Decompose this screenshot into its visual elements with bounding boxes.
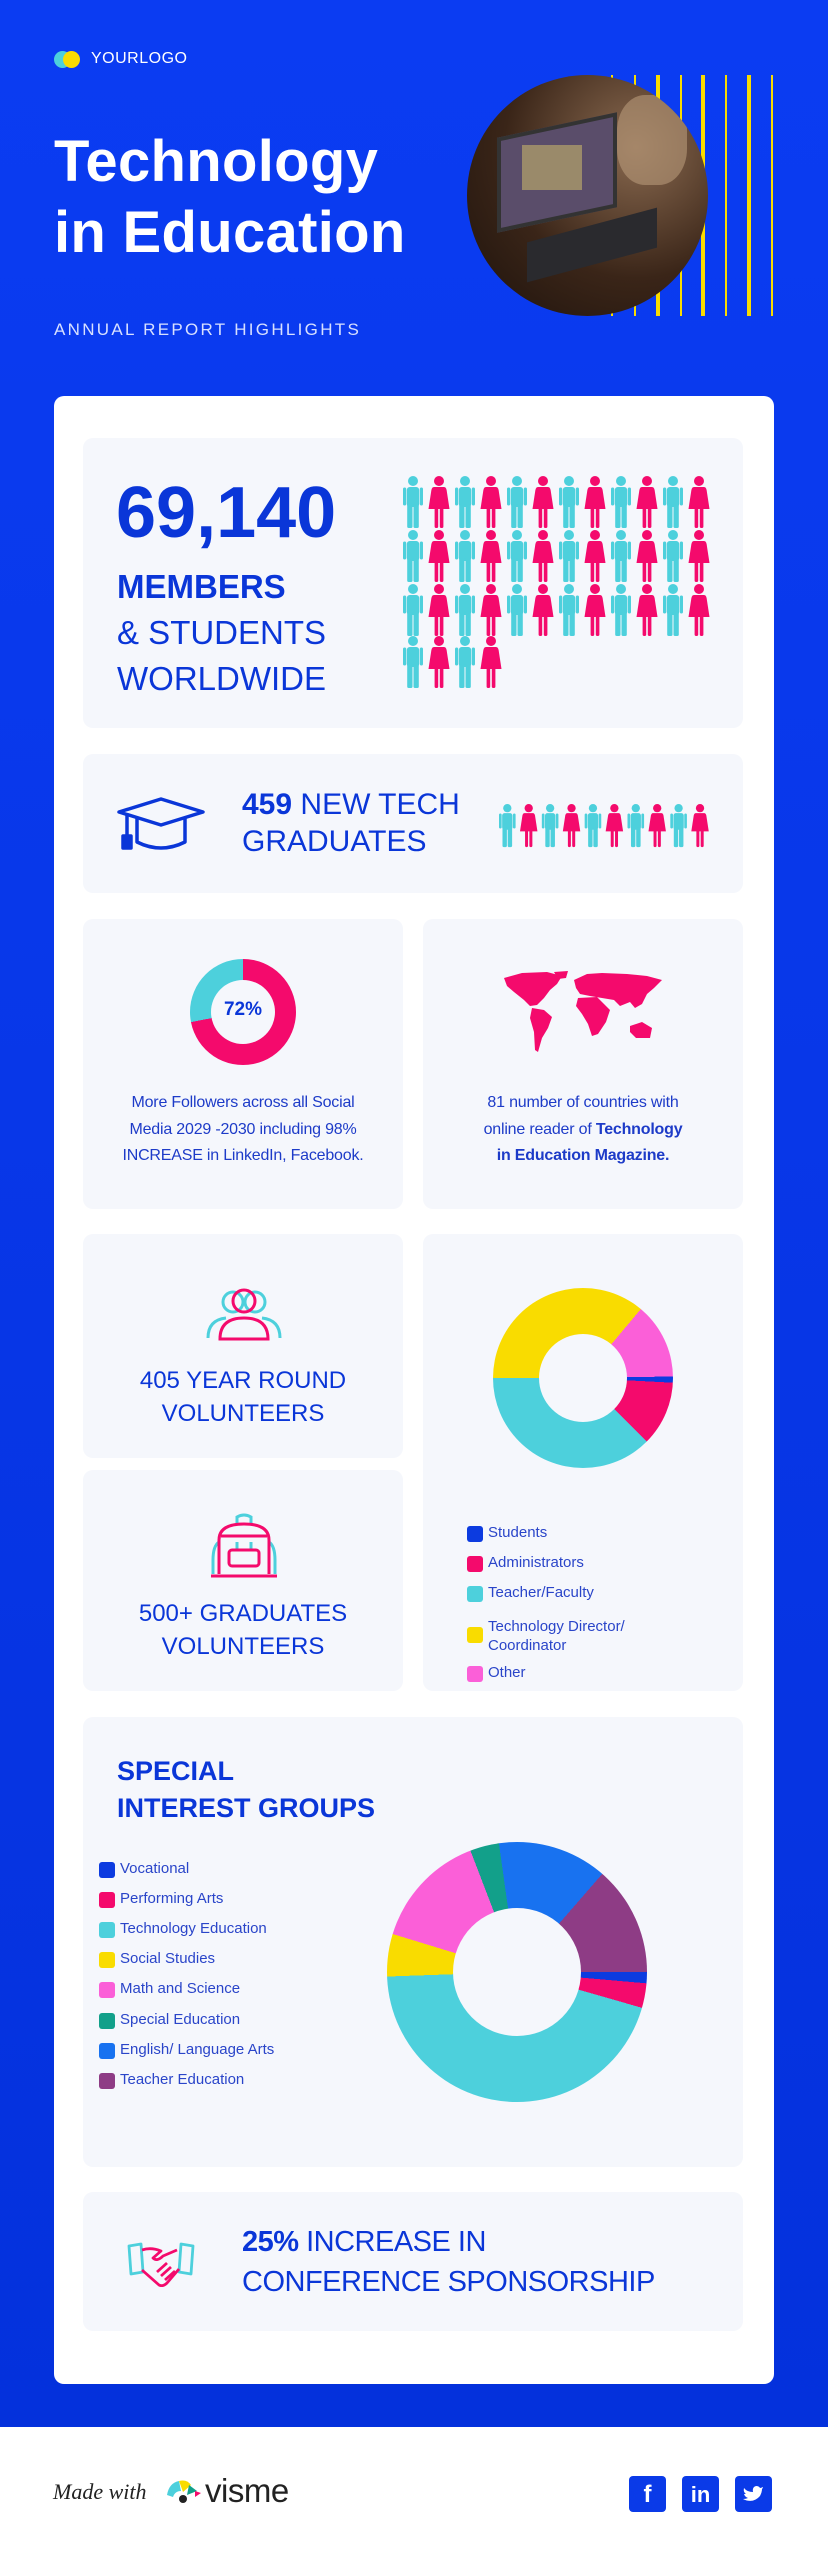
panel: roles donut chart bbox=[423, 1234, 743, 1691]
text: More Followers across all Social bbox=[131, 1094, 354, 1111]
footer: made with visme bbox=[52, 2472, 289, 2509]
icon: graduation cap bbox=[117, 797, 205, 850]
text bbox=[139, 1600, 347, 1660]
legend: Technology Director/ bbox=[488, 1618, 625, 1635]
decorative yellow lines bbox=[611, 75, 773, 316]
legend bbox=[99, 1860, 274, 2089]
panel: members bbox=[83, 438, 743, 728]
panel: countries bbox=[423, 919, 743, 1209]
donut chart bbox=[493, 1288, 673, 1468]
white card bbox=[54, 396, 774, 2384]
footer: made with visme: Made with bbox=[53, 2479, 146, 2504]
panel: graduates bbox=[83, 754, 743, 893]
members text: & STUDENTS bbox=[117, 614, 326, 651]
panel: special interest groups bbox=[83, 1717, 743, 2167]
subtitle: ANNUAL REPORT HIGHLIGHTS bbox=[54, 320, 361, 339]
text: VOLUNTEERS bbox=[162, 1633, 324, 1660]
title: in Education bbox=[54, 200, 406, 265]
big number: 69,140 bbox=[116, 473, 336, 553]
legend: English/ Language Arts bbox=[120, 2041, 274, 2058]
people pictogram bbox=[403, 476, 710, 688]
icon: world map bbox=[504, 971, 662, 1052]
panel: year round volunteers bbox=[83, 1234, 403, 1458]
text bbox=[140, 1367, 346, 1427]
members text: WORLDWIDE bbox=[117, 660, 326, 697]
donut 72% bbox=[190, 959, 296, 1065]
text bbox=[122, 1094, 364, 1164]
icon: handshake bbox=[128, 2242, 194, 2287]
panel: social followers bbox=[83, 919, 403, 1209]
legend: Social Studies bbox=[120, 1950, 215, 1967]
text: INCREASE in LinkedIn, Facebook. bbox=[122, 1147, 364, 1164]
graduates text: GRADUATES bbox=[242, 825, 426, 858]
text bbox=[484, 1094, 682, 1164]
text: online reader of Technology bbox=[484, 1120, 682, 1138]
graduates text bbox=[242, 788, 460, 858]
legend: Math and Science bbox=[120, 1980, 240, 1997]
text: VOLUNTEERS bbox=[162, 1400, 324, 1427]
members text: MEMBERS bbox=[117, 568, 286, 605]
social icons: f bbox=[644, 2481, 652, 2508]
graduates text: 459 NEW TECH bbox=[242, 788, 460, 821]
legend: Administrators bbox=[488, 1554, 584, 1571]
text: 81 number of countries with bbox=[487, 1094, 679, 1111]
text bbox=[242, 2226, 655, 2298]
legend: Other bbox=[488, 1664, 526, 1681]
legend: Performing Arts bbox=[120, 1890, 223, 1907]
legend: Teacher/Faculty bbox=[488, 1584, 594, 1601]
text: in Education Magazine. bbox=[497, 1147, 669, 1164]
text: 405 YEAR ROUND bbox=[140, 1367, 346, 1394]
logo: YOURLOGO bbox=[91, 50, 187, 67]
legend: Teacher Education bbox=[120, 2071, 244, 2088]
text: 500+ GRADUATES bbox=[139, 1600, 347, 1627]
text: 25% INCREASE IN bbox=[242, 2226, 486, 2258]
panel: graduate volunteers bbox=[83, 1470, 403, 1691]
legend: Technology Education bbox=[120, 1920, 267, 1937]
heading: SPECIAL bbox=[117, 1756, 234, 1786]
donut chart bbox=[387, 1842, 647, 2102]
donut 72%: 72% bbox=[224, 999, 262, 1020]
title bbox=[54, 129, 406, 265]
text: CONFERENCE SPONSORSHIP bbox=[242, 2266, 655, 2298]
footer: made with visme: visme bbox=[205, 2472, 289, 2509]
title: Technology bbox=[54, 129, 378, 194]
members text bbox=[117, 568, 326, 697]
panel: sponsorship bbox=[83, 2192, 743, 2331]
legend: Coordinator bbox=[488, 1637, 566, 1654]
legend: Special Education bbox=[120, 2011, 240, 2028]
legend: Vocational bbox=[120, 1860, 189, 1877]
heading bbox=[117, 1756, 375, 1823]
social icons bbox=[629, 2476, 772, 2512]
icon: backpack bbox=[211, 1514, 277, 1578]
legend bbox=[467, 1524, 625, 1682]
heading: INTEREST GROUPS bbox=[117, 1793, 375, 1823]
people pictogram small bbox=[499, 804, 709, 848]
icon: people bbox=[206, 1288, 282, 1340]
text: Media 2029 -2030 including 98% bbox=[129, 1120, 357, 1138]
legend: Students bbox=[488, 1524, 547, 1541]
social icons: in bbox=[691, 2482, 710, 2507]
logo bbox=[54, 50, 187, 68]
photo circle bbox=[467, 75, 708, 316]
